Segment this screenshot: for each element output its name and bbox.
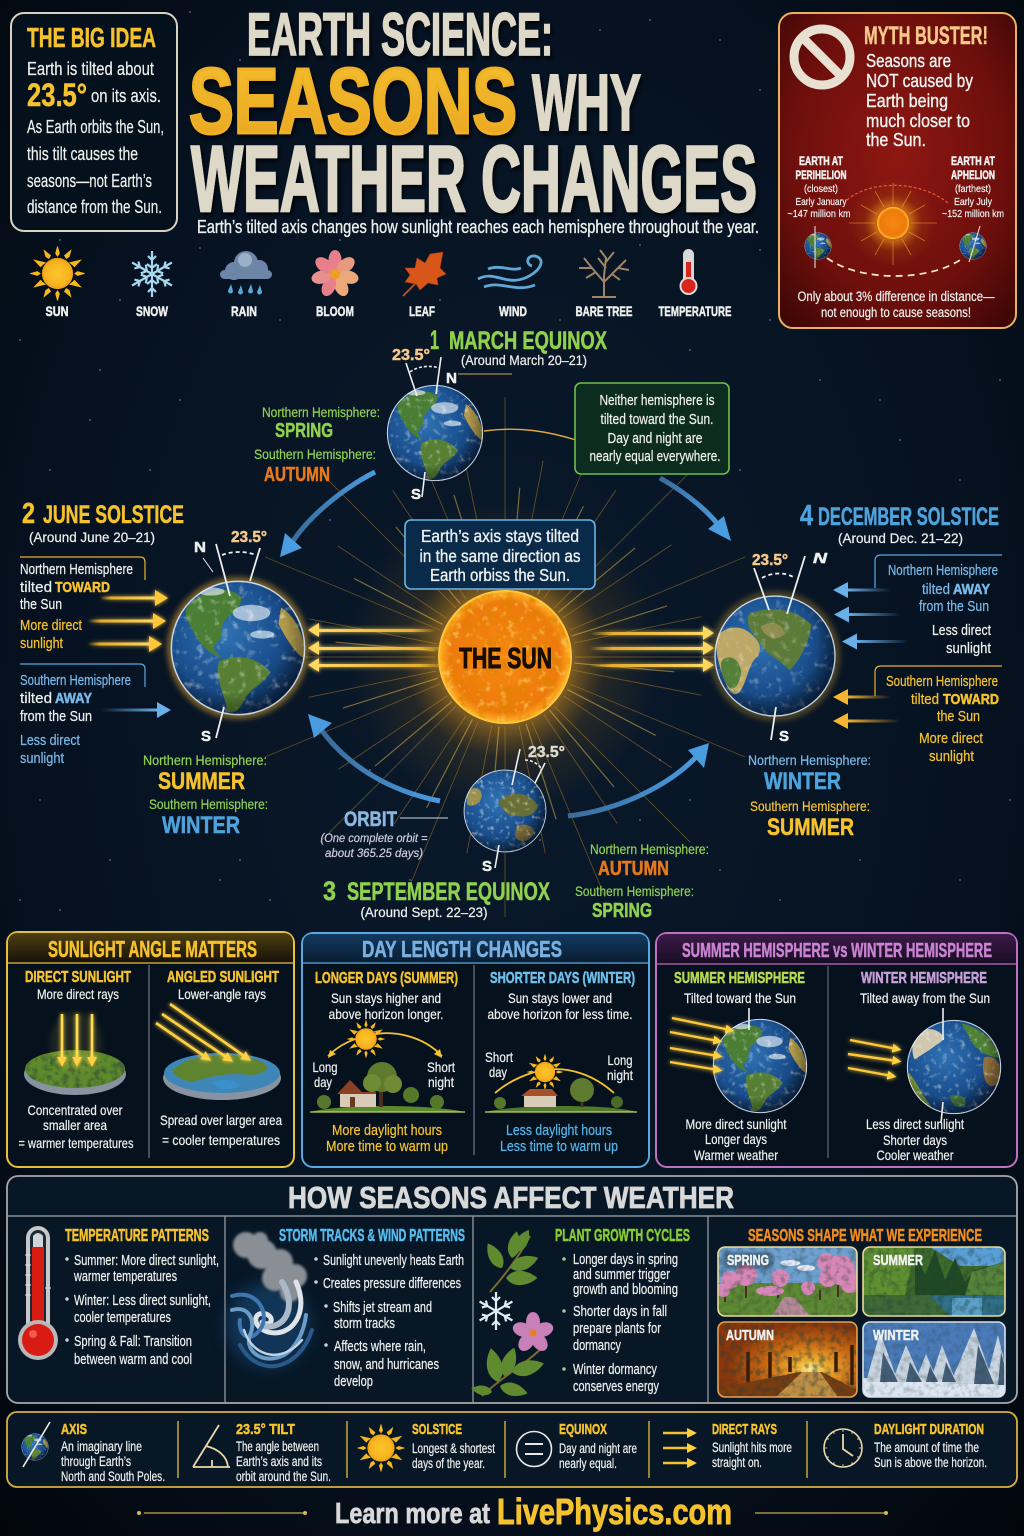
june southern notes: AWAY (55, 691, 92, 707)
photo: winter (863, 1322, 1010, 1397)
june hemisphere labels (143, 752, 268, 839)
glossary: axis: through Earth’s (61, 1454, 131, 1469)
december southern notes: TOWARD (943, 692, 999, 708)
shorter days: night (607, 1067, 633, 1083)
december hemisphere labels (748, 752, 871, 841)
icon labels: RAIN (231, 303, 257, 319)
icon labels: BARE TREE (576, 303, 632, 319)
sun rays to earth (308, 623, 714, 672)
longer days: LONGER DAYS (SUMMER) (315, 970, 458, 987)
callout: axis direction: in the same direction as (420, 546, 581, 566)
summer hemisphere: SUMMER HEMISPHERE (674, 970, 805, 987)
perihelion label: Early January (796, 196, 847, 208)
december southern notes: sunlight (929, 749, 974, 765)
glossary: direct rays: straight on. (712, 1455, 762, 1470)
orbit label: ORBIT (344, 808, 397, 831)
aphelion label (942, 156, 1004, 220)
myth footnote: not enough to cause seasons! (821, 305, 971, 320)
glossary: daylight duration: Sun is above the horizon. (874, 1455, 987, 1470)
summer hemisphere: Tilted toward the Sun (684, 990, 796, 1006)
december southern notes: tilted (911, 692, 939, 708)
aphelion label: Early July (954, 196, 993, 208)
icon labels: LEAF (409, 303, 435, 319)
temperature patterns: warmer temperatures (73, 1269, 177, 1285)
june southern notes (20, 664, 145, 767)
heading: march equinox: MARCH EQUINOX (449, 327, 607, 355)
winter hemisphere: WINTER HEMISPHERE (861, 970, 987, 987)
icon row (31, 247, 731, 319)
june hemisphere labels: SUMMER (158, 768, 245, 795)
panel: summer vs winter hemisphere (656, 933, 1017, 1167)
angled sunlight: = cooler temperatures (162, 1132, 280, 1148)
panel: the big idea: on its axis. (91, 86, 161, 106)
storm tracks (226, 1225, 465, 1390)
shorter days: Short (485, 1049, 513, 1065)
icon: leaf (403, 252, 446, 296)
longer days (310, 970, 465, 1155)
june southern notes: Less direct (20, 733, 80, 749)
glossary: axis (22, 1421, 165, 1484)
longer days: Short (427, 1059, 455, 1075)
shorter days: above horizon for less time. (488, 1006, 632, 1022)
heading: june solstice (22, 498, 184, 545)
june southern notes: Southern Hemisphere (20, 673, 131, 689)
aphelion label: ~152 million km (942, 208, 1004, 220)
callout: equinox: Neither hemisphere is (600, 392, 714, 409)
earth: june solstice (167, 529, 309, 745)
glossary: direct rays: Sunlight hits more (712, 1440, 792, 1455)
december hemisphere labels: Southern Hemisphere: (750, 798, 870, 814)
photo: summer: SUMMER (873, 1253, 923, 1269)
earth: march equinox: 23.5° (392, 347, 430, 364)
panel: sunlight angle matters (7, 932, 294, 1167)
earth: september equinox (464, 744, 565, 875)
perihelion label (788, 156, 851, 220)
march hemisphere labels: AUTUMN (264, 464, 330, 486)
december hemisphere labels: Northern Hemisphere: (748, 752, 871, 768)
icon labels: WIND (499, 303, 527, 319)
panel: the big idea: seasons—not Earth’s (27, 171, 152, 191)
heading: september equinox: (Around Sept. 22–23) (360, 904, 488, 920)
storm tracks: STORM TRACKS & WIND PATTERNS (279, 1225, 465, 1245)
june sun arrows (88, 590, 168, 652)
the sun (245, 397, 765, 917)
callout: axis direction (405, 520, 595, 589)
storm tracks: Sunlight unevenly heats Earth (323, 1253, 464, 1269)
panel: the big idea: THE BIG IDEA (27, 22, 156, 53)
longer days: day (314, 1074, 332, 1090)
glossary: equinox (516, 1421, 637, 1471)
earth: june solstice: S (201, 728, 211, 745)
heading: september equinox (323, 876, 550, 920)
direct sunlight: Concentrated over (28, 1102, 123, 1118)
icon: temperature (680, 249, 696, 294)
title: SEASONS (189, 49, 517, 153)
shorter days: Less daylight hours (506, 1123, 612, 1139)
panel: sunlight angle matters: SUNLIGHT ANGLE MATTERS (48, 936, 257, 962)
panel: the big idea: 23.5° (27, 77, 87, 113)
june southern notes: sunlight (20, 751, 64, 767)
earth: march equinox: N (446, 370, 457, 387)
shorter days: day (489, 1064, 507, 1080)
december southern notes (875, 666, 1002, 765)
panel: how seasons affect weather (7, 1176, 1017, 1403)
earth: june solstice: N (194, 539, 206, 556)
direct sunlight (18, 969, 134, 1151)
earth: march equinox (387, 347, 512, 503)
footer: Learn more at (335, 1498, 490, 1530)
earth: december solstice (710, 550, 840, 745)
earth: june solstice: 23.5° (231, 529, 267, 546)
longer days: above horizon longer. (328, 1006, 444, 1022)
temperature patterns: Spring & Fall: Transition (74, 1334, 192, 1350)
photo: winter: WINTER (873, 1328, 919, 1344)
longer days: Long (312, 1059, 338, 1075)
plant growth cycles: PLANT GROWTH CYCLES (555, 1225, 690, 1245)
myth statement (866, 51, 973, 150)
plant growth cycles: conserves energy (573, 1379, 660, 1395)
angled sunlight: Spread over larger area (160, 1112, 282, 1128)
shorter days: Sun stays lower and (508, 990, 612, 1006)
longer days: night (428, 1074, 454, 1090)
glossary: direct rays (663, 1421, 792, 1470)
direct sunlight: More direct rays (37, 987, 119, 1002)
march hemisphere labels: SPRING (275, 420, 333, 442)
glossary: tilt: The angle between (236, 1439, 319, 1454)
myth statement: the Sun. (866, 130, 926, 150)
orbit label: (One complete orbit = (320, 831, 428, 845)
june northern notes: the Sun (20, 597, 62, 613)
june hemisphere labels: Northern Hemisphere: (143, 752, 267, 768)
heading: december solstice: 4 (800, 500, 813, 532)
sun label: THE SUN (459, 643, 552, 675)
summer hemisphere: Longer days (705, 1131, 767, 1147)
plant growth cycles: Shorter days in fall (573, 1304, 667, 1320)
callout: equinox (575, 383, 729, 474)
december arrows gold (833, 689, 901, 729)
photo: spring (716, 1247, 860, 1316)
heading: june solstice: (Around June 20–21) (29, 529, 155, 545)
orbit label: about 365.25 days) (325, 846, 423, 860)
panel: the big idea: As Earth orbits the Sun, (27, 117, 164, 137)
glossary: direct rays: DIRECT RAYS (712, 1421, 777, 1438)
angled sunlight (156, 969, 282, 1148)
september hemisphere labels: Northern Hemisphere: (590, 841, 709, 857)
heading: september equinox: 3 (323, 876, 336, 906)
heading: september equinox: SEPTEMBER EQUINOX (347, 878, 550, 906)
june hemisphere labels: Southern Hemisphere: (149, 796, 268, 812)
myth statement: Earth being (866, 91, 948, 111)
temperature patterns: between warm and cool (74, 1352, 192, 1368)
glossary: equinox: Day and night are (559, 1441, 637, 1456)
glossary: solstice: days of the year. (412, 1456, 485, 1471)
glossary: equinox: EQUINOX (559, 1421, 607, 1438)
angled sunlight: Lower-angle rays (178, 987, 266, 1002)
december northern notes: Northern Hemisphere (888, 563, 998, 579)
winter hemisphere: Tilted away from the Sun (860, 990, 990, 1006)
glossary: solstice: SOLSTICE (412, 1421, 462, 1438)
december northern notes (875, 555, 1002, 657)
plant illustration (470, 1227, 555, 1400)
june southern notes: tilted (20, 691, 52, 707)
september hemisphere labels: SPRING (592, 900, 652, 922)
perihelion label: EARTH AT (799, 156, 843, 168)
plant growth cycles: growth and blooming (573, 1282, 678, 1298)
shorter days: SHORTER DAYS (WINTER) (490, 970, 635, 987)
heading: march equinox: 1 (430, 325, 439, 355)
earth: december solstice: N (813, 550, 828, 567)
storm tracks: Affects where rain, (334, 1339, 426, 1355)
icon: wind (478, 256, 541, 288)
heading: march equinox: (Around March 20–21) (461, 352, 587, 368)
december southern notes: More direct (919, 731, 983, 747)
temperature patterns: Winter: Less direct sunlight, (74, 1293, 211, 1309)
december southern notes: Southern Hemisphere (886, 674, 998, 690)
photo: autumn (718, 1322, 857, 1397)
icon: prohibition sign (794, 29, 850, 85)
aphelion label: (farthest) (955, 183, 991, 195)
glossary: tilt (193, 1421, 331, 1484)
icon: rain (220, 251, 272, 294)
december northern notes: tilted (922, 582, 950, 598)
june northern notes: More direct (20, 618, 82, 634)
temperature patterns: Summer: More direct sunlight, (74, 1253, 219, 1269)
storm illustration (226, 1232, 312, 1367)
callout: axis direction: Earth’s axis stays tilted (421, 526, 579, 546)
icon: snow (130, 251, 174, 297)
december northern notes: Less direct (932, 623, 991, 639)
glossary: tilt: 23.5° TILT (236, 1421, 295, 1438)
myth footnote (798, 289, 995, 320)
december arrows blue (833, 582, 909, 650)
glossary: equinox: nearly equal. (559, 1456, 617, 1471)
aphelion label: EARTH AT (951, 156, 995, 168)
earth: march equinox: S (411, 486, 421, 503)
panel: the big idea: distance from the Sun. (27, 197, 162, 217)
direct sunlight: = warmer temperatures (18, 1135, 134, 1151)
longer days: More time to warm up (326, 1139, 448, 1155)
glossary: axis: AXIS (61, 1421, 87, 1438)
photo: summer (863, 1247, 1005, 1316)
winter hemisphere: Less direct sunlight (866, 1116, 964, 1132)
june northern notes: TOWARD (55, 580, 110, 596)
icon labels (46, 303, 732, 319)
panel: the big idea (11, 13, 177, 231)
plant growth cycles: and summer trigger (573, 1267, 670, 1283)
direct sunlight: smaller area (43, 1117, 107, 1133)
footer: LivePhysics.com (497, 1491, 732, 1532)
myth statement: much closer to (866, 111, 970, 131)
seasons shape what we experience (716, 1225, 1010, 1397)
temperature patterns (18, 1225, 219, 1368)
icon labels: SUN (46, 303, 68, 319)
icon: bloom (310, 250, 360, 298)
plant growth cycles: prepare plants for (573, 1321, 661, 1337)
panel: day length changes (302, 933, 649, 1167)
photo: autumn: AUTUMN (726, 1328, 774, 1344)
icon: bare tree (579, 250, 629, 298)
winter hemisphere: Cooler weather (876, 1147, 954, 1163)
title: EARTH SCIENCE: (247, 1, 553, 68)
temperature patterns: cooler temperatures (74, 1310, 171, 1326)
longer days: More daylight hours (332, 1123, 442, 1139)
orbit diagram (20, 325, 1002, 922)
longer days: Sun stays higher and (331, 990, 441, 1006)
june southern notes: from the Sun (20, 709, 92, 725)
panel: the big idea: this tilt causes the (27, 144, 138, 164)
perihelion label: (closest) (804, 183, 838, 195)
panel: how seasons affect weather: HOW SEASONS AFFECT WEATHER (288, 1180, 734, 1215)
winter hemisphere: Shorter days (883, 1132, 947, 1148)
title: WHY (532, 58, 641, 147)
storm tracks: Creates pressure differences (323, 1276, 461, 1292)
shorter days: Less time to warm up (500, 1139, 618, 1155)
plant growth cycles (470, 1225, 690, 1400)
summer hemisphere: Warmer weather (694, 1147, 778, 1163)
march hemisphere labels: Northern Hemisphere: (262, 404, 380, 420)
angled sunlight: ANGLED SUNLIGHT (167, 969, 279, 986)
callout: equinox: Day and night are (608, 430, 702, 447)
december southern notes: the Sun (937, 709, 980, 725)
summer hemisphere: More direct sunlight (686, 1116, 787, 1132)
shorter days (485, 970, 637, 1155)
icon labels: TEMPERATURE (658, 303, 732, 319)
heading: december solstice (800, 500, 999, 546)
december northern notes: AWAY (953, 582, 990, 598)
glossary: axis: North and South Poles. (61, 1469, 165, 1484)
aphelion label: APHELION (951, 170, 995, 182)
glossary: daylight duration (824, 1421, 987, 1470)
storm tracks: develop (334, 1374, 373, 1390)
plant growth cycles: Winter dormancy (573, 1362, 658, 1378)
june northern notes: Northern Hemisphere (20, 562, 133, 578)
september hemisphere labels (575, 841, 709, 922)
glossary: tilt: orbit around the Sun. (236, 1469, 331, 1484)
december northern notes: sunlight (946, 641, 991, 657)
december hemisphere labels: WINTER (764, 768, 841, 795)
june northern notes: tilted (20, 580, 52, 596)
icon labels: SNOW (136, 303, 169, 319)
heading: june solstice: JUNE SOLSTICE (43, 501, 184, 529)
june arrow blue (100, 702, 171, 718)
icon: sun (31, 247, 84, 300)
plant growth cycles: Longer days in spring (573, 1252, 678, 1268)
callout: axis direction: Earth orbiss the Sun. (430, 565, 570, 585)
shorter days: Long (608, 1052, 632, 1068)
myth statement: Seasons are (866, 51, 951, 71)
photo: spring: SPRING (727, 1253, 769, 1269)
direct sunlight: DIRECT SUNLIGHT (25, 969, 131, 986)
subtitle: Earth’s tilted axis changes how sunlight reaches each hemisphere throughout the year. (197, 216, 759, 237)
heading: december solstice: (Around Dec. 21–22) (838, 530, 963, 546)
earth: september equinox: S (482, 858, 492, 875)
june northern notes (20, 557, 145, 652)
march hemisphere labels (254, 404, 380, 486)
storm tracks: Shifts jet stream and (333, 1300, 432, 1316)
footer (139, 1491, 886, 1532)
september hemisphere labels: Southern Hemisphere: (575, 883, 694, 899)
earth: december solstice: 23.5° (752, 552, 788, 569)
thermometer (18, 1226, 58, 1360)
orbit arrows (290, 472, 722, 816)
december northern notes: from the Sun (919, 599, 989, 615)
title (189, 1, 757, 231)
panel: myth buster (779, 13, 1016, 328)
myth statement: NOT caused by (866, 71, 973, 91)
glossary: tilt: Earth’s axis and its (236, 1454, 322, 1469)
earth: september equinox: 23.5° (528, 744, 565, 761)
december hemisphere labels: SUMMER (767, 814, 854, 841)
storm tracks: storm tracks (334, 1316, 395, 1332)
glossary: daylight duration: The amount of time the (874, 1440, 979, 1455)
earth: december solstice: S (779, 728, 789, 745)
september hemisphere labels: AUTUMN (598, 858, 669, 880)
march hemisphere labels: Southern Hemisphere: (254, 446, 376, 462)
glossary: solstice (358, 1421, 495, 1471)
panel: the big idea: Earth is tilted about (27, 59, 154, 79)
orbit label (320, 808, 448, 860)
panel: glossary (7, 1412, 1017, 1487)
june northern notes: sunlight (20, 636, 63, 652)
glossary: solstice: Longest & shortest (412, 1441, 495, 1456)
winter hemisphere (848, 970, 1001, 1163)
summer hemisphere (670, 970, 807, 1163)
perihelion label: ~147 million km (788, 208, 851, 220)
myth footnote: Only about 3% difference in distance— (798, 289, 995, 304)
heading: march equinox (430, 325, 607, 368)
callout: equinox: nearly equal everywhere. (590, 448, 720, 465)
plant growth cycles: dormancy (573, 1338, 622, 1354)
temperature patterns: TEMPERATURE PATTERNS (65, 1225, 209, 1245)
glossary: axis: An imaginary line (61, 1439, 142, 1454)
panel: day length changes: DAY LENGTH CHANGES (362, 936, 562, 962)
heading: june solstice: 2 (22, 498, 35, 530)
callout: equinox: tilted toward the Sun. (600, 411, 714, 428)
perihelion label: PERIHELION (796, 170, 846, 182)
storm tracks: snow, and hurricanes (334, 1357, 439, 1373)
june hemisphere labels: WINTER (162, 812, 240, 839)
icon labels: BLOOM (316, 303, 354, 319)
distance diagram (805, 179, 986, 276)
orbit band behind equinox callout (484, 429, 576, 440)
